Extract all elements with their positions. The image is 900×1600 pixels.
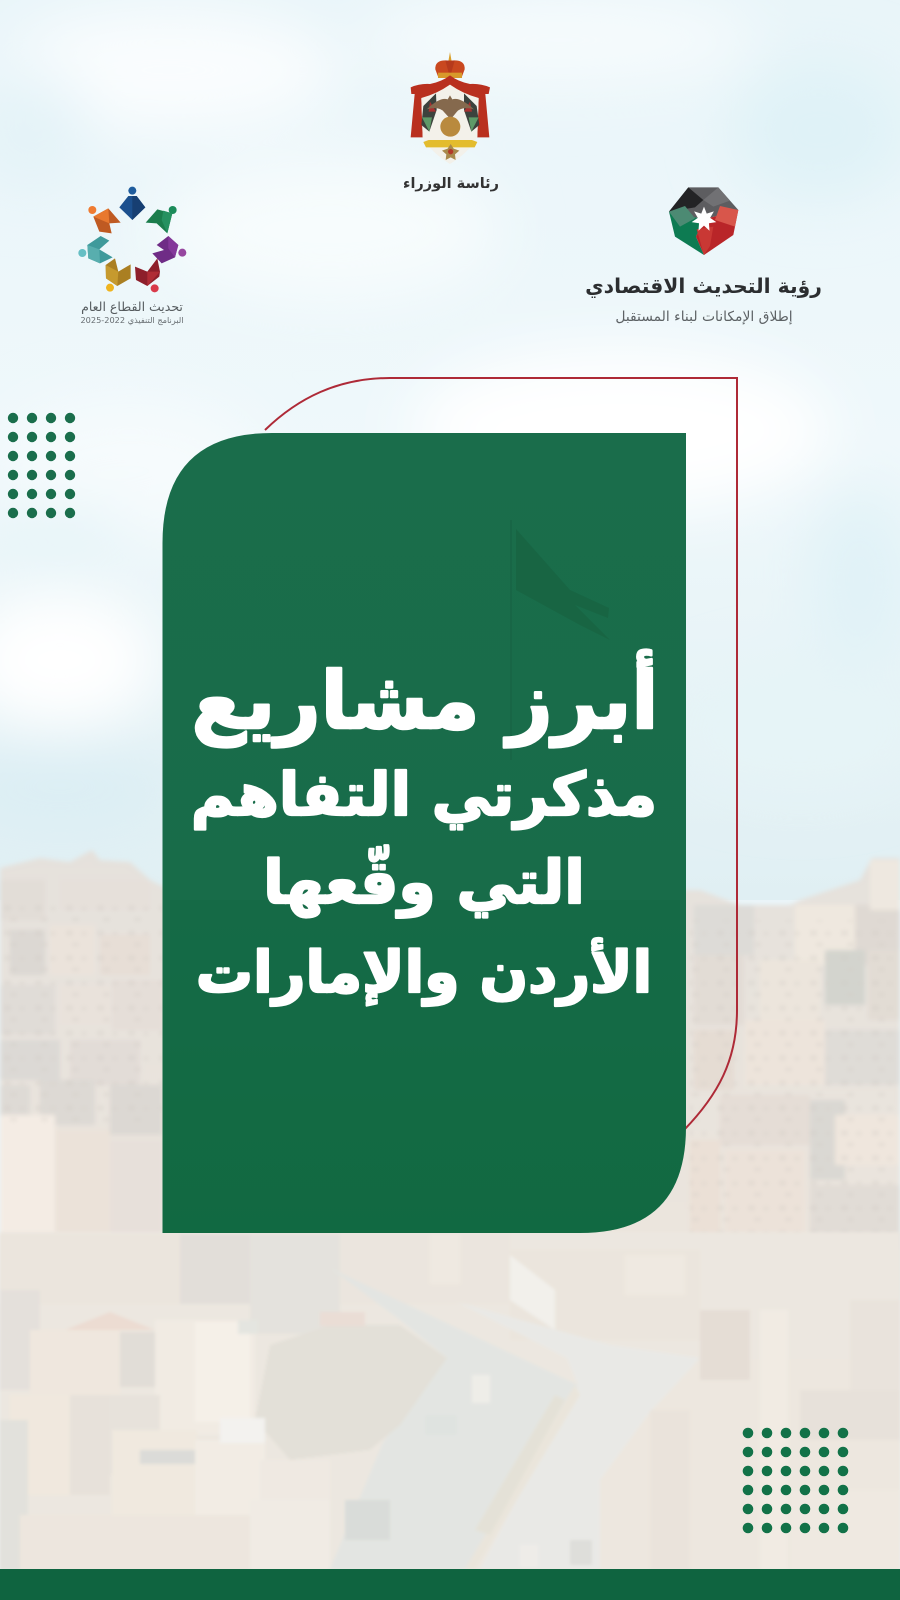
right buildings [600,1360,900,1569]
decorative dot grid: upper left [8,413,75,518]
flag watermark [518,591,680,1230]
left buildings [0,1234,250,1304]
mantle [411,75,490,137]
left road lane [330,1268,578,1569]
icon: economic modernization vision logo [669,187,738,255]
eagle [427,95,474,119]
red outline frame [265,378,737,1130]
icon: public sector modernization logo [78,187,186,292]
title line 2: مذكرتي التفاهم [191,761,657,830]
title line 3: التي وقّعها [263,845,585,918]
person: orange [88,206,121,233]
person: purple [152,236,186,263]
shield [421,85,479,164]
red segment [696,206,738,255]
title line 1: أبرز مشاريع [192,649,658,747]
buildings behind road [250,1234,340,1334]
median [465,1385,580,1569]
flags [421,93,479,132]
bottom band [0,1569,900,1600]
person: teal [78,236,113,263]
right road lane [457,1302,700,1569]
black-grey segment [669,187,738,219]
orb [440,117,460,137]
person: blue [119,187,145,220]
star [692,207,716,231]
decorative dot grid: lower right [743,1428,848,1533]
hill [255,1325,447,1460]
star medal [442,144,459,160]
background: sky and clouds [0,0,900,900]
cars [472,1375,490,1403]
green segment [669,206,704,255]
logo text: public sector title: تحديث القطاع العام [81,299,183,314]
panel: main green card [162,433,686,1233]
background: city panorama [0,850,900,1600]
logo text: prime ministry: رئاسة الوزراء [403,176,499,192]
icon: coat of arms [411,52,490,164]
title line 4: الأردن والإمارات [196,938,652,1007]
logo text: executive program years: البرنامج التنفيذي 2022-2025 [80,315,184,325]
person: green [146,206,177,233]
person: gold [106,258,131,292]
crown [435,52,465,78]
lower city and road [0,1232,900,1570]
logo text: vision tagline: إطلاق الإمكانات لبناء المستقبل [615,309,793,325]
title [191,649,658,1007]
window texture [0,900,900,1240]
logo text: vision title: رؤية التحديث الاقتصادي [585,274,822,299]
ribbon [423,140,477,147]
person: red [135,258,160,292]
